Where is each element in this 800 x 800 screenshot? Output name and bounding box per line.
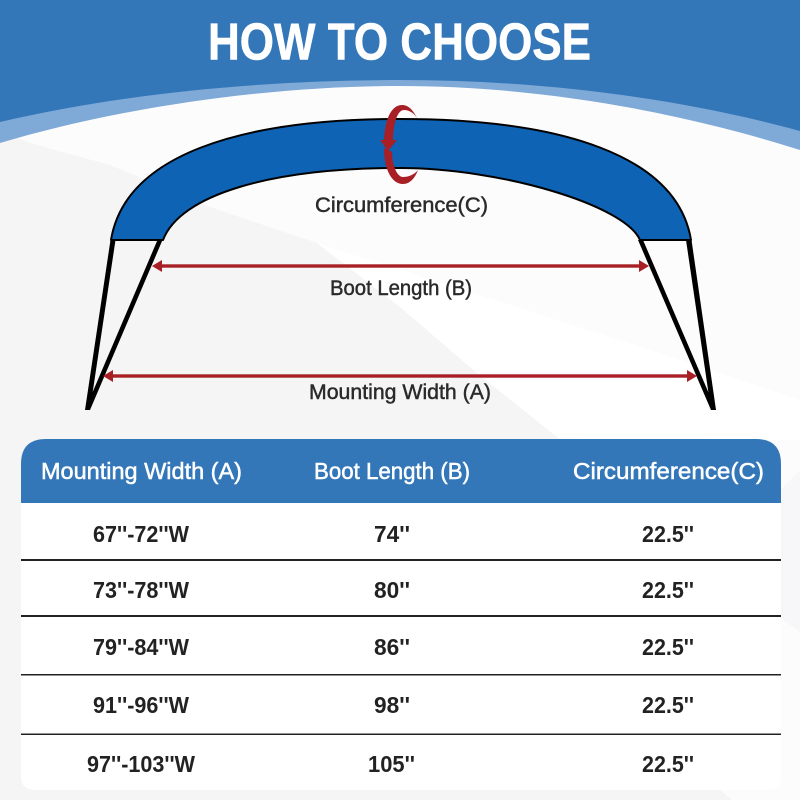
row 2: 22.5'' xyxy=(642,577,694,603)
row 2: 80'' xyxy=(374,577,410,603)
header banner xyxy=(0,0,800,150)
diagram: bimini top xyxy=(85,105,716,410)
row 1: 67''-72''W xyxy=(93,521,189,547)
table header: Mounting Width (A) xyxy=(41,458,242,484)
row 5: 22.5'' xyxy=(642,751,694,777)
circumference arrow xyxy=(380,105,418,184)
size table xyxy=(21,439,781,790)
left support poles xyxy=(85,240,162,410)
row 3 xyxy=(93,634,694,660)
boot length arrow xyxy=(152,260,649,272)
row 5 xyxy=(87,751,694,777)
row 3: 79''-84''W xyxy=(93,634,189,660)
row 3: 22.5'' xyxy=(642,634,694,660)
table header: Circumference(C) xyxy=(573,458,764,484)
row 1 xyxy=(93,521,694,547)
row 2 xyxy=(93,577,694,603)
row 4: 98'' xyxy=(374,692,410,718)
title: HOW TO CHOOSE xyxy=(208,14,591,72)
row 1: 74'' xyxy=(374,521,410,547)
row 3: 86'' xyxy=(374,634,410,660)
table body xyxy=(21,500,781,790)
label: circumference: Circumference(C) xyxy=(315,194,488,217)
table header: Boot Length (B) xyxy=(314,458,470,484)
row 2: 73''-78''W xyxy=(93,577,189,603)
right support poles xyxy=(638,240,716,410)
row 4 xyxy=(93,692,694,718)
label: mounting width: Mounting Width (A) xyxy=(309,381,491,404)
row 1: 22.5'' xyxy=(642,521,694,547)
row 4: 91''-96''W xyxy=(93,692,189,718)
canopy xyxy=(111,119,691,240)
label: boot length: Boot Length (B) xyxy=(330,277,472,300)
row 5: 97''-103''W xyxy=(87,751,195,777)
table header xyxy=(21,439,781,503)
row 5: 105'' xyxy=(368,751,415,777)
row 4: 22.5'' xyxy=(642,692,694,718)
row dividers xyxy=(21,559,781,735)
mounting width arrow xyxy=(103,370,697,382)
